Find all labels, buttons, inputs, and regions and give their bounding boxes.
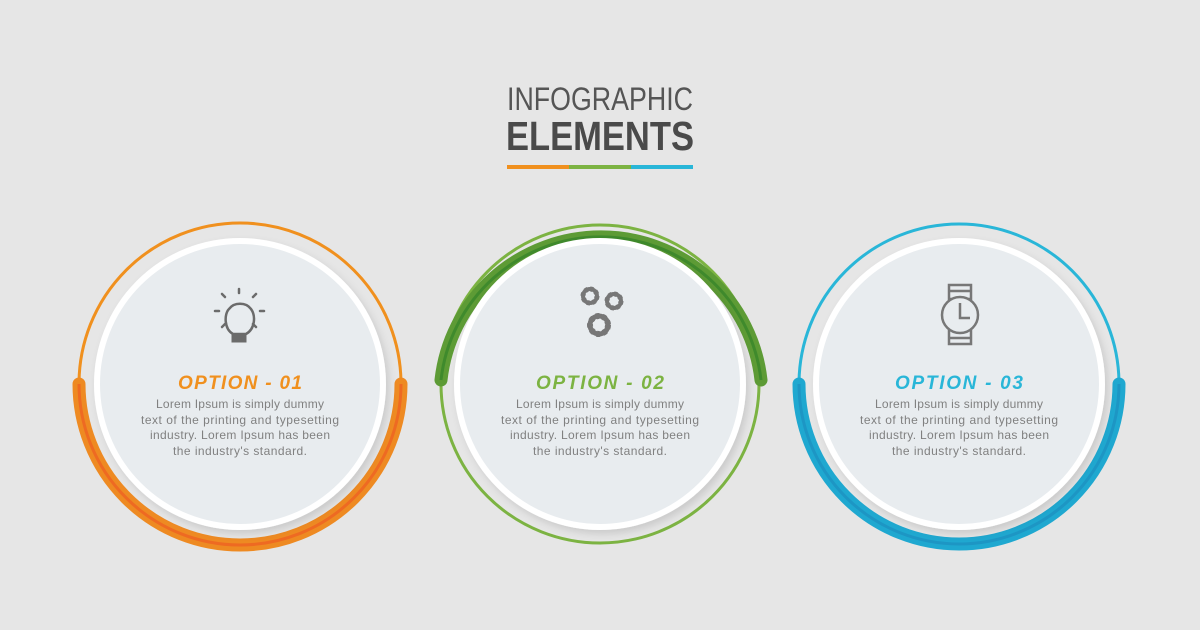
text block: text of the printing and typesetting <box>501 413 699 427</box>
text block <box>860 397 1058 458</box>
text block: Lorem Ipsum is simply dummy <box>156 397 324 411</box>
text block: the industry's standard. <box>892 444 1026 458</box>
text block: the industry's standard. <box>533 444 667 458</box>
panel: option 02 <box>441 225 761 543</box>
icon: light bulb <box>215 289 264 342</box>
icon: watch <box>942 285 978 344</box>
title: INFOGRAPHIC <box>507 81 693 117</box>
text block: Lorem Ipsum is simply dummy <box>875 397 1043 411</box>
heading: option 02: OPTION - 02 <box>536 373 664 394</box>
text block: text of the printing and typesetting <box>141 413 339 427</box>
text block: text of the printing and typesetting <box>860 413 1058 427</box>
text block: the industry's standard. <box>173 444 307 458</box>
heading: option 03: OPTION - 03 <box>895 373 1023 394</box>
heading: option 01: OPTION - 01 <box>178 373 302 394</box>
text block <box>501 397 699 458</box>
title: ELEMENTS <box>506 113 694 159</box>
panel: option 01 <box>79 223 401 545</box>
text block: industry. Lorem Ipsum has been <box>510 428 690 442</box>
text block: industry. Lorem Ipsum has been <box>869 428 1049 442</box>
title <box>506 81 694 169</box>
text block: Lorem Ipsum is simply dummy <box>516 397 684 411</box>
icon: gears <box>583 289 621 334</box>
panel: option 03 <box>799 224 1119 544</box>
text block: industry. Lorem Ipsum has been <box>150 428 330 442</box>
text block <box>141 397 339 458</box>
